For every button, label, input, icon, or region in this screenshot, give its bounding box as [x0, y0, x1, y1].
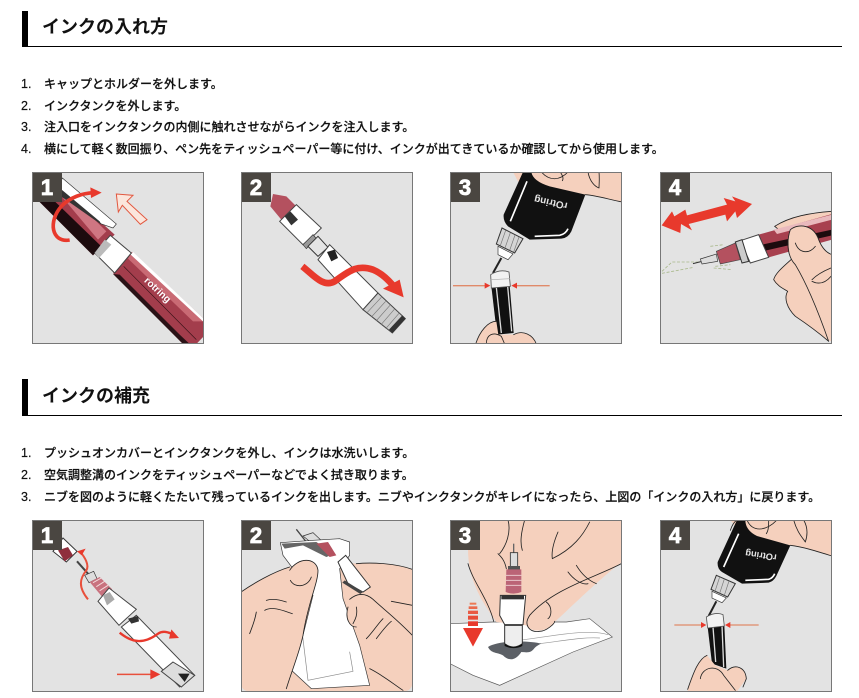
ink blot	[488, 641, 541, 659]
nib collar over tissue	[338, 555, 370, 594]
step number badge: 4	[669, 175, 682, 200]
hand	[468, 520, 622, 631]
step number badge: 3	[459, 175, 471, 200]
nib unit	[500, 544, 526, 648]
panel: step 3 inject ink	[450, 172, 622, 344]
icon: red curved arrow	[302, 266, 404, 297]
panel: refill step 4 inject ink	[660, 520, 832, 692]
instructions list: refilling steps: ニブを図のように軽くたたいて残っているインクを出します。ニブやインクタンクがキレイになったら、上図の「インクの入れ方」に戻ります。	[44, 490, 820, 504]
step number badge	[32, 172, 62, 202]
instructions list: refilling steps: 空気調整溝のインクをティッシュペーパーなどでよく拭き取ります。	[44, 468, 414, 482]
instructions list: refilling steps	[21, 446, 820, 504]
nib and spring	[77, 561, 112, 597]
step number badge: 1	[41, 175, 53, 200]
step number badge: 4	[669, 523, 682, 548]
step number badge	[32, 520, 62, 550]
instructions list: filling steps	[21, 77, 664, 156]
icon: width arrows	[674, 622, 759, 628]
instructions list: filling steps: 4.	[21, 142, 31, 156]
step number badge: 2	[250, 523, 262, 548]
instructions list: filling steps: 3.	[21, 120, 31, 134]
hand holding tank	[688, 655, 746, 691]
instructions list: refilling steps: 3.	[21, 490, 31, 504]
ink bottle	[493, 172, 585, 273]
ghost motion lines	[662, 245, 732, 273]
nib behind tissue	[296, 529, 325, 545]
instructions list: refilling steps: 1.	[21, 446, 31, 460]
ink tank	[491, 271, 514, 335]
step number badge: 1	[41, 523, 53, 548]
ink bottle: rOtring	[533, 193, 569, 211]
tissue	[450, 619, 612, 685]
panel: refill step 2 wipe with tissue	[241, 520, 413, 692]
instructions list: refilling steps: プッシュオンカバーとインクタンクを外し、インクは水洗いします。	[44, 446, 414, 460]
step number badge: 2	[250, 175, 262, 200]
ink tank	[706, 613, 726, 669]
hand holding bottle	[513, 172, 622, 202]
disassembled pen	[270, 194, 405, 333]
panel: step 2 remove ink tank	[241, 172, 413, 344]
pen grip and tank	[98, 588, 195, 687]
ink bottle	[709, 520, 790, 616]
step number badge	[450, 172, 480, 202]
icon: red down arrow	[463, 603, 483, 647]
hand holding bottle	[730, 520, 832, 556]
instructions list: filling steps: 横にして軽く数回振り、ペン先をティッシュペーパー等に付け、インクが出てきているか確認してから使用します。	[44, 142, 664, 156]
hands	[241, 562, 412, 691]
section heading: refilling ink	[22, 379, 842, 416]
icon: width arrows	[453, 283, 550, 289]
hand holding tank	[476, 321, 536, 344]
section heading: how to fill ink: インクの入れ方	[42, 17, 168, 37]
technical pen	[693, 214, 832, 264]
hand holding pen	[774, 226, 832, 341]
instructions list: filling steps: 2.	[21, 99, 31, 113]
step number badge	[660, 520, 690, 550]
icon: red curved arrows	[77, 549, 179, 679]
pen barrel: rotring	[142, 275, 173, 306]
push-on cover	[53, 538, 77, 562]
panel: refill step 3 tap out ink	[450, 520, 622, 692]
step number badge	[450, 520, 480, 550]
step number badge: 3	[459, 523, 471, 548]
icon: red rotation arrow	[53, 187, 102, 240]
instructions list: refilling steps: 2.	[21, 468, 31, 482]
step number badge	[660, 172, 690, 202]
section heading: refilling ink: インクの補充	[42, 386, 150, 406]
tissue	[280, 539, 370, 689]
panel: step 4 shake pen	[660, 172, 832, 344]
back of hand above pen	[775, 211, 832, 236]
instructions list: filling steps: 注入口をインクタンクの内側に触れさせながらインクを注入します。	[44, 120, 414, 134]
instructions list: filling steps: キャップとホルダーを外します。	[44, 77, 223, 91]
thumb and finger lines	[246, 560, 412, 690]
ink bottle: rOtring	[744, 548, 777, 563]
instructions list: filling steps: インクタンクを外します。	[44, 99, 186, 113]
panel: step 1 remove cap	[32, 172, 204, 344]
step number badge	[241, 172, 271, 202]
icon: outline pull arrow	[116, 194, 147, 224]
step number badge	[241, 520, 271, 550]
panel: refill step 1 disassemble	[32, 520, 204, 692]
icon: red double arrow	[662, 196, 752, 233]
pen barrel	[40, 178, 204, 344]
instructions list: filling steps: 1.	[21, 77, 31, 91]
section heading: how to fill ink	[22, 11, 842, 47]
